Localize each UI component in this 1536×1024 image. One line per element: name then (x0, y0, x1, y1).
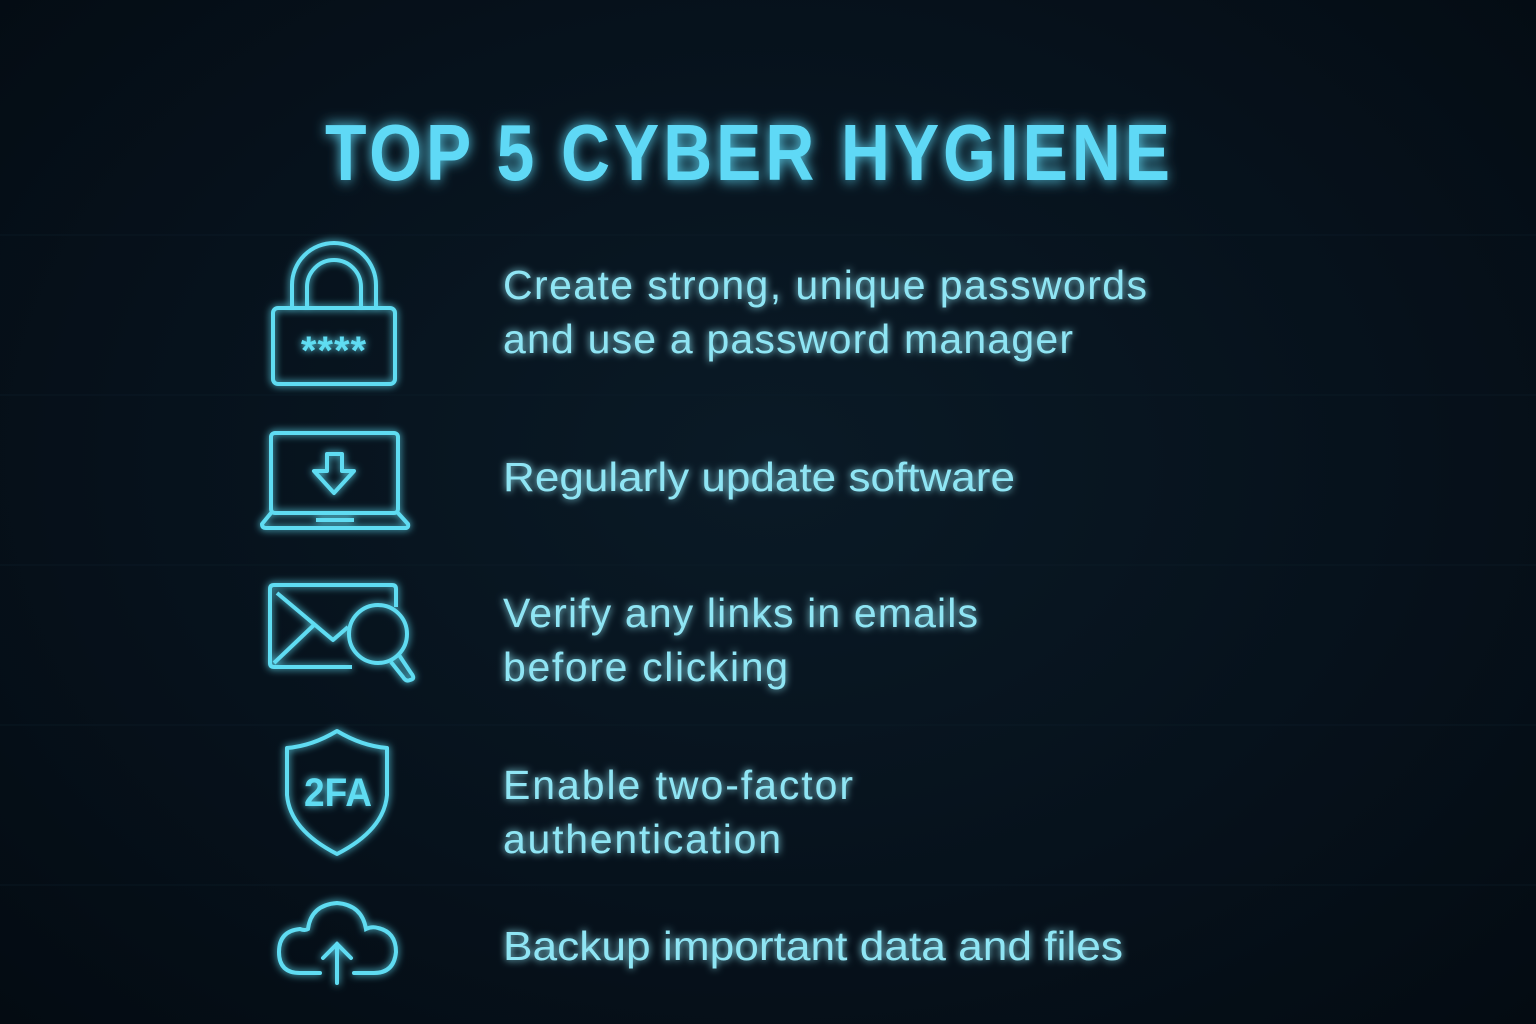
icon: cloud upload (279, 903, 396, 983)
title: TOP 5 CYBER HYGIENE (325, 108, 1170, 197)
icon: padlock (273, 243, 395, 384)
icon: laptop download (262, 433, 408, 528)
text: update: Regularly update software (503, 454, 1015, 500)
text: links: Verify any links in emails (503, 590, 978, 636)
icon: 2FA shield (287, 731, 387, 854)
text: 2fa: Enable two-factor (503, 762, 853, 808)
text: passwords: and use a password manager (503, 316, 1073, 362)
icon: email magnifier (270, 585, 413, 681)
icon: padlock: **** (301, 329, 367, 373)
text: passwords: Create strong, unique passwords (503, 262, 1147, 308)
icon: 2FA shield: 2FA (304, 771, 372, 815)
text: backup: Backup important data and files (503, 923, 1123, 969)
text: 2fa: authentication (503, 816, 781, 862)
text: links: before clicking (503, 644, 788, 690)
